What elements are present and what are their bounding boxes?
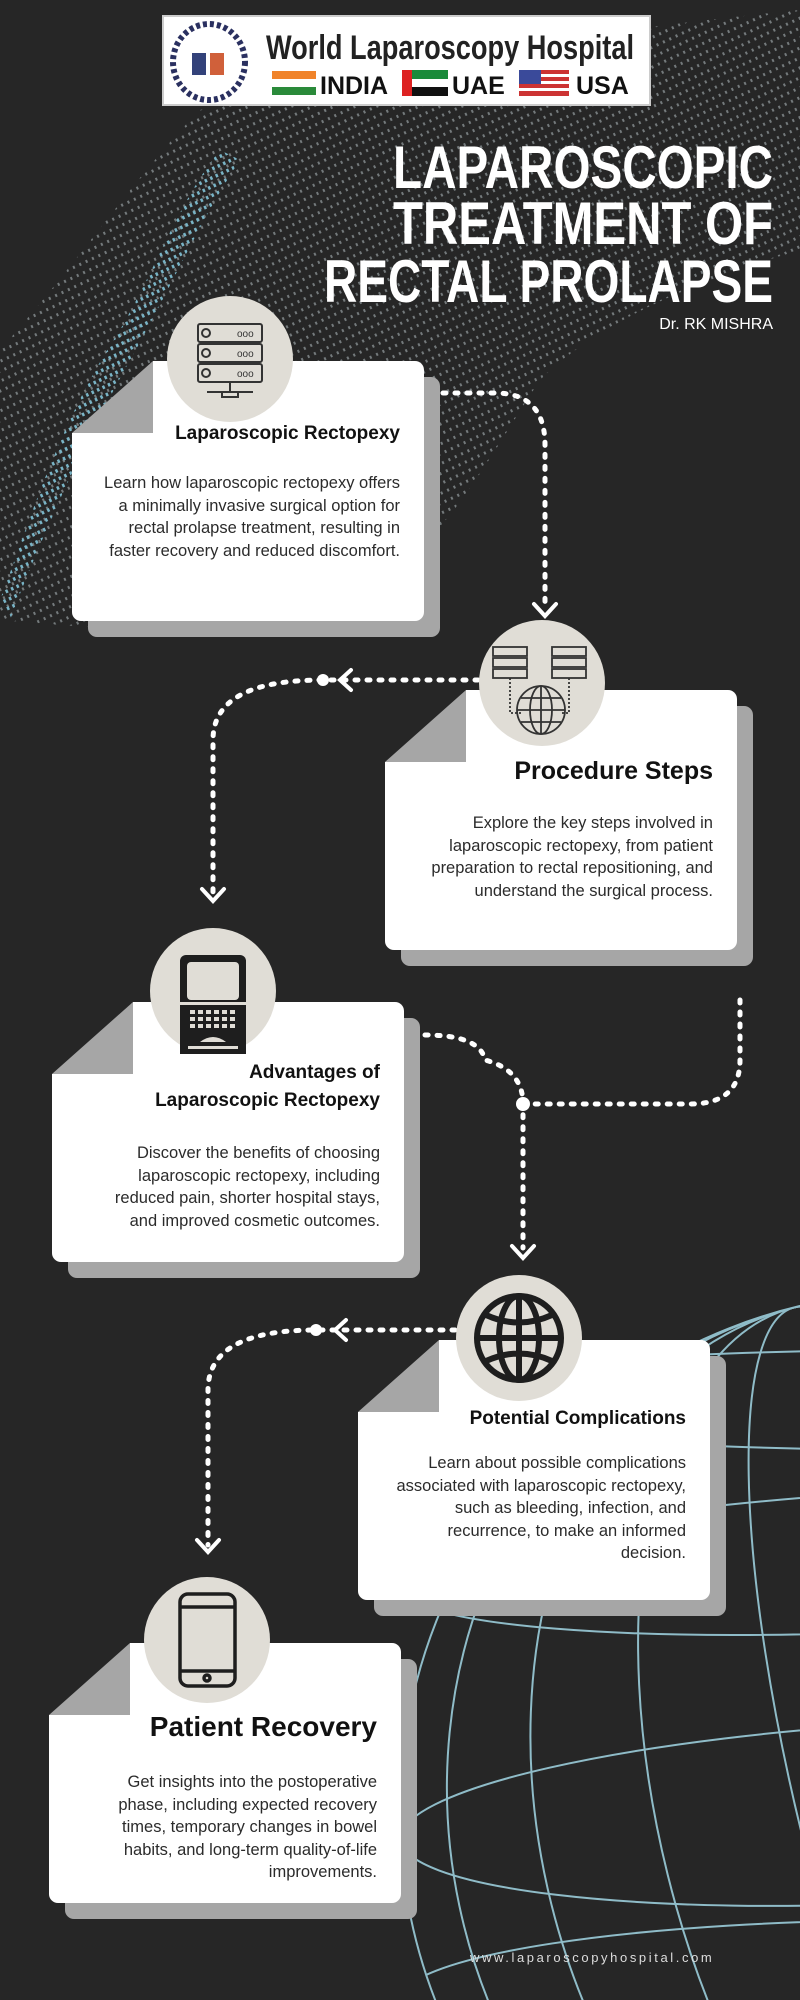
text block [396, 1454, 686, 1562]
heading: Advantages of [249, 1062, 380, 1083]
text block: and improved cosmetic outcomes. [130, 1212, 380, 1230]
icon: wreath emblem [173, 24, 245, 100]
text block: preparation to rectal repositioning, and [431, 859, 713, 877]
panel: Laparoscopic Rectopexy [72, 361, 440, 637]
text block [104, 474, 400, 560]
icon: server stack [167, 296, 293, 422]
text block: reduced pain, shorter hospital stays, [115, 1189, 380, 1207]
icon: phone [144, 1577, 270, 1703]
text block: improvements. [269, 1863, 377, 1881]
text block: laparoscopic rectopexy, from patient [449, 836, 713, 854]
text block: such as bleeding, infection, and [455, 1499, 686, 1517]
icon: server stack: ooo [237, 329, 254, 340]
text block: Get insights into the postoperative [128, 1773, 377, 1791]
text block: recurrence, to make an informed [448, 1522, 686, 1540]
logo: USA [576, 72, 629, 100]
panel: Procedure Steps [385, 690, 753, 966]
text block: faster recovery and reduced discomfort. [109, 542, 400, 560]
text block: a minimally invasive surgical option for [118, 496, 400, 514]
heading [155, 1062, 380, 1111]
text block: times, temporary changes in bowel [122, 1818, 377, 1836]
text block [431, 814, 713, 900]
panel: Advantages of Laparoscopic Rectopexy [52, 1002, 420, 1278]
title: Dr. RK MISHRA [659, 316, 773, 333]
icon: globe [456, 1275, 582, 1401]
text block: habits, and long-term quality-of-life [124, 1840, 377, 1858]
text block: Explore the key steps involved in [473, 814, 713, 832]
icon: server stack: ooo [237, 369, 254, 380]
text block: Learn how laparoscopic rectopexy offers [104, 474, 400, 492]
text block: decision. [621, 1544, 686, 1562]
icon: server stack: ooo [237, 349, 254, 360]
heading: Patient Recovery [150, 1711, 377, 1742]
logo [162, 15, 651, 106]
text block: Discover the benefits of choosing [137, 1144, 380, 1162]
heading: Laparoscopic Rectopexy [175, 423, 400, 444]
heading: Procedure Steps [514, 757, 713, 785]
text block [115, 1144, 380, 1230]
footer website: www.laparoscopyhospital.com [470, 1950, 714, 1965]
heading: Potential Complications [470, 1408, 686, 1429]
logo: UAE [452, 72, 505, 100]
title [324, 134, 773, 333]
text block: rectal prolapse treatment, resulting in [129, 519, 400, 537]
icon: servers with globe [479, 620, 605, 746]
heading: Laparoscopic Rectopexy [155, 1090, 380, 1111]
text block: phase, including expected recovery [118, 1796, 377, 1814]
text block: understand the surgical process. [475, 882, 713, 900]
text block: Learn about possible complications [428, 1454, 686, 1472]
text block: associated with laparoscopic rectopexy, [396, 1476, 686, 1494]
icon: device keyboard [150, 928, 276, 1054]
text block [118, 1773, 377, 1881]
panel: Patient Recovery [49, 1643, 417, 1919]
panel: Potential Complications [358, 1340, 726, 1616]
logo: INDIA [320, 72, 388, 100]
text block: laparoscopic rectopexy, including [138, 1166, 380, 1184]
